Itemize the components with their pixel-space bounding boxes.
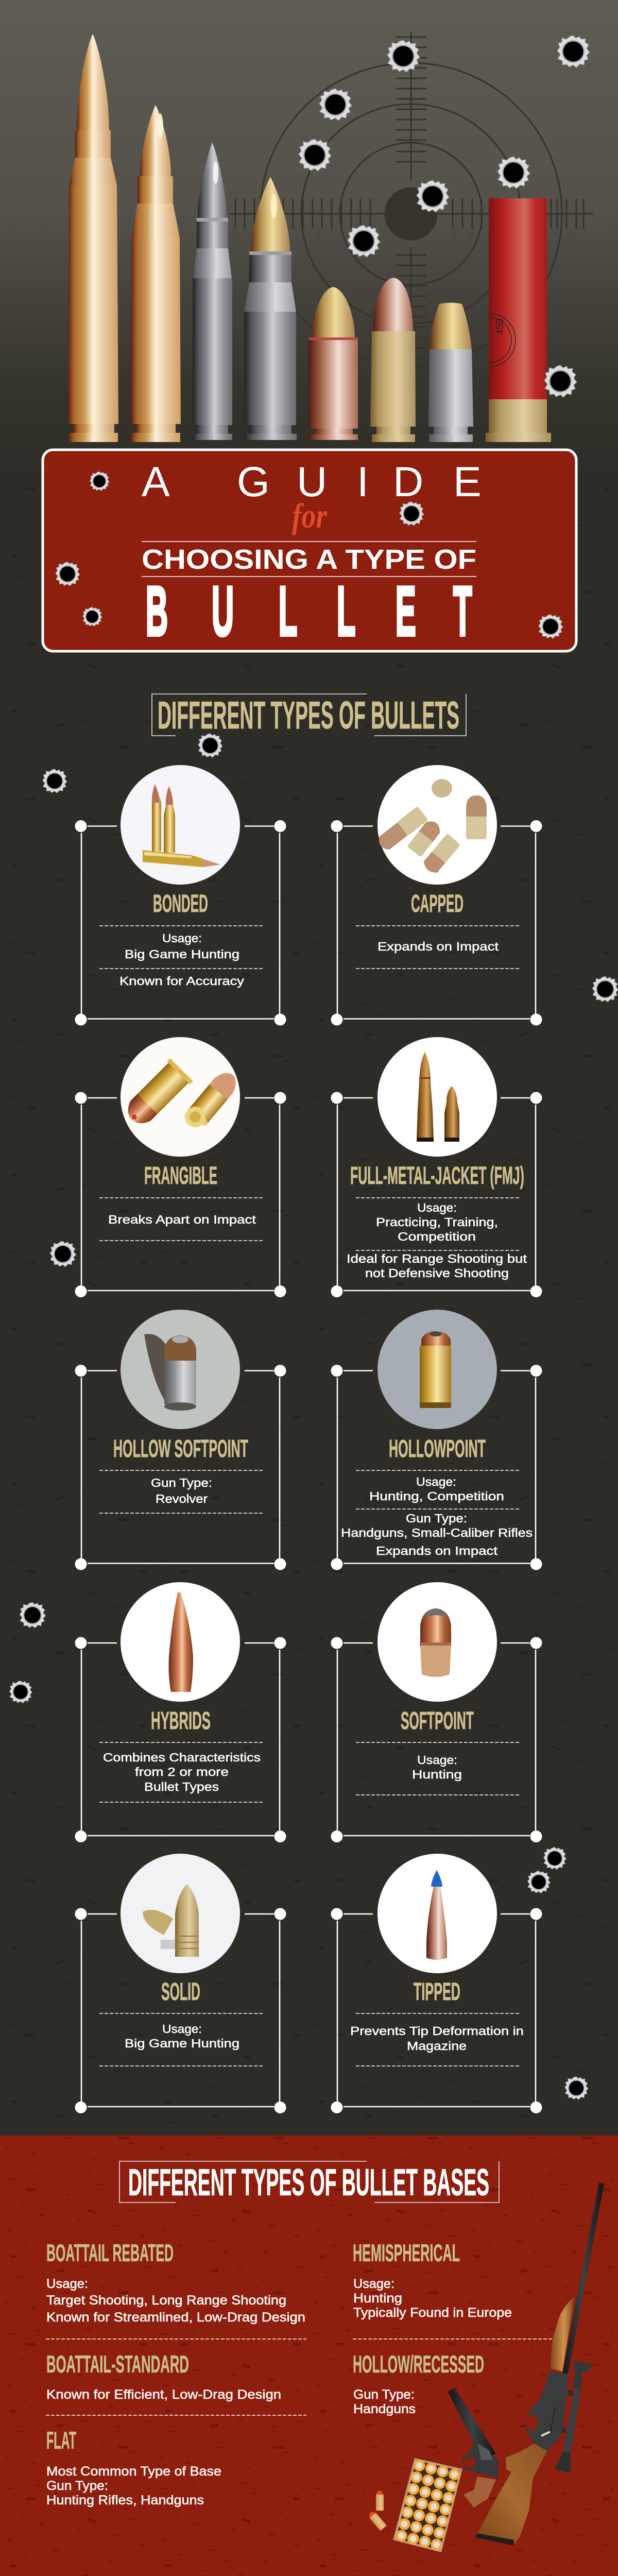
text: tipped details: Prevents Tip Deformation in [350, 2024, 524, 2038]
illustration: rifle [475, 2183, 604, 2546]
base: flat: FLAT [46, 2427, 76, 2454]
illustration: shooting target: 1 [232, 231, 235, 238]
bullet holes: upper grid [9, 734, 618, 2099]
card: tipped [331, 1854, 542, 2113]
text: solid details [99, 2013, 264, 2066]
photo: frangible bullets [120, 1037, 242, 1157]
bullet holes on plate [56, 471, 563, 638]
background: dark textured area [0, 479, 618, 2136]
text: tipped details [350, 2013, 524, 2066]
base: boattail rebated: BOATTAIL REBATED [46, 2239, 174, 2266]
title line: A Guide: A GUIDE [0, 459, 482, 505]
text: hybrids details: Combines Characteristics [103, 1751, 261, 1764]
text: hollow softpoint details: Revolver [156, 1492, 208, 1505]
text: hollowpoint details: Expands on Impact [376, 1544, 498, 1557]
photo: hollowpoint bullet [377, 1310, 497, 1429]
text: hybrids details: from 2 or more [135, 1765, 229, 1778]
photo: solid bullets [121, 1854, 240, 1973]
illustration: shooting target: 3 [555, 231, 558, 238]
base: flat: Gun Type: [46, 2479, 108, 2493]
text: solid details: Usage: [162, 2022, 202, 2036]
label: hollowpoint: HOLLOWPOINT [389, 1435, 486, 1463]
text: bonded details: Usage: [162, 931, 202, 945]
photo: softpoint bullet [377, 1582, 497, 1702]
text: bonded details [99, 926, 264, 988]
text: softpoint details: Usage: [417, 1753, 457, 1767]
illustration: cartridge box [393, 2458, 462, 2552]
text: FMJ details: not Defensive Shooting [365, 1266, 509, 1280]
title line: Choosing a type of: CHOOSING A TYPE OF [142, 544, 476, 575]
card: solid [75, 1854, 286, 2113]
illustration: shooting target: 2 [248, 231, 251, 238]
text: hybrids details [99, 1742, 264, 1802]
cartridge 4 [244, 177, 297, 440]
label: hybrids: HYBRIDS [151, 1707, 211, 1735]
cartridge 5 [308, 287, 358, 440]
text: softpoint details: Hunting [412, 1768, 462, 1781]
text: hollowpoint details: Hunting, Competition [369, 1489, 504, 1503]
photo: FMJ cartridges [377, 1037, 497, 1157]
illustration: shooting target: 8 [469, 231, 472, 238]
label: solid: SOLID [161, 1978, 200, 2006]
base: boattail standard: BOATTAIL-STANDARD [46, 2350, 189, 2378]
text: frangible details: Breaks Apart on Impact [108, 1213, 256, 1226]
text: hollow softpoint details: Gun Type: [151, 1476, 212, 1489]
photo: hybrid bullet [121, 1582, 240, 1702]
photo: bonded bullets [121, 765, 240, 885]
illustration: shooting target: 6 [317, 231, 320, 238]
shotgun shell: 450 [495, 318, 506, 335]
text: bonded details: Known for Accuracy [119, 974, 245, 988]
background: red section [0, 2136, 618, 2576]
illustration: shooting target: 9 [453, 231, 456, 238]
base: boattail rebated [46, 2239, 305, 2325]
text: frangible details [99, 1198, 264, 1241]
text: solid details: Big Game Hunting [125, 2037, 239, 2050]
background: top gradient [0, 0, 618, 479]
illustration: shooting target: 1 [589, 231, 592, 238]
base: hemispherical: Typically Found in Europe [353, 2306, 512, 2320]
card: bonded [75, 765, 286, 1025]
cartridge 1 [68, 34, 118, 442]
base: hollow recessed: Gun Type: [353, 2387, 415, 2402]
title plate [0, 450, 576, 651]
label: bonded: BONDED [153, 890, 208, 918]
base: hollow recessed [353, 2339, 555, 2416]
text: capped details [356, 926, 521, 969]
card: frangible [75, 1037, 286, 1297]
label: softpoint: SOFTPOINT [401, 1707, 474, 1735]
card: softpoint [331, 1582, 542, 1842]
label: frangible: FRANGIBLE [144, 1162, 217, 1190]
cartridge 2 [131, 105, 181, 442]
label: capped: CAPPED [411, 890, 464, 918]
base: boattail standard [46, 2339, 306, 2402]
illustration: shooting target: 7 [334, 231, 337, 238]
text: hollowpoint details: Gun Type: [406, 1512, 467, 1525]
text: capped details: Expands on Impact [377, 940, 499, 953]
text: hollowpoint details [341, 1470, 533, 1557]
heading: different types of bullets [152, 693, 466, 737]
card: hollowpoint [331, 1310, 542, 1570]
base: hemispherical: HEMISPHERICAL [353, 2239, 460, 2266]
cartridge 3 [193, 142, 232, 440]
base: hemispherical: Hunting [353, 2291, 402, 2306]
text: FMJ details: Practicing, Training, [376, 1215, 498, 1229]
base: hemispherical: Usage: [353, 2277, 394, 2291]
text: hollow softpoint details [99, 1470, 264, 1513]
text: FMJ details [347, 1198, 527, 1280]
label: hollow softpoint: HOLLOW SOFTPOINT [113, 1435, 248, 1463]
illustration: loose cartridges [367, 2490, 387, 2531]
base: boattail rebated: Known for Streamlined, Low-Drag Design [46, 2310, 305, 2325]
photo: tipped bullet [377, 1854, 497, 1973]
cartridge 6 [370, 278, 416, 442]
illustration: revolver [448, 2388, 498, 2507]
base: boattail rebated: Usage: [46, 2277, 88, 2291]
base: hemispherical [353, 2239, 512, 2320]
cartridge 7 [428, 303, 473, 442]
illustration: shooting target: 2 [572, 231, 575, 238]
title word: Bullet: BULLET [146, 572, 472, 651]
card: hollow softpoint [75, 1310, 286, 1570]
text: hollowpoint details: Handguns, Small-Caliber Rifles [341, 1526, 533, 1539]
title word: for: for [292, 496, 327, 535]
base: boattail standard: Known for Efficient, Low-Drag Design [46, 2387, 281, 2402]
photo: capped bullets [375, 765, 497, 885]
base: hollow recessed: HOLLOW/RECESSED [353, 2350, 484, 2378]
illustration: row of cartridges [68, 34, 551, 442]
photo: hollow softpoint bullet [121, 1310, 240, 1429]
base: boattail rebated: Target Shooting, Long Range Shooting [46, 2293, 286, 2308]
bullet holes around target [299, 36, 590, 397]
base: flat: Hunting Rifles, Handguns [46, 2493, 204, 2507]
card: full metal jacket [331, 1037, 542, 1297]
text: bonded details: Big Game Hunting [125, 947, 239, 961]
text: FMJ details: Usage: [417, 1201, 457, 1214]
illustration: shooting target [230, 32, 593, 391]
shotgun shell [486, 198, 551, 442]
text: softpoint details [356, 1742, 521, 1795]
text: tipped details: Magazine [407, 2039, 467, 2053]
card: capped [331, 765, 542, 1025]
text: hybrids details: Bullet Types [144, 1780, 219, 1793]
base: flat: Most Common Type of Base [46, 2464, 221, 2479]
label: tipped: TIPPED [414, 1978, 460, 2006]
base: flat [46, 2415, 306, 2507]
base: hollow recessed: Handguns [353, 2402, 416, 2416]
text: FMJ details: Ideal for Range Shooting but [347, 1252, 527, 1265]
text: hollowpoint details: Usage: [416, 1475, 456, 1488]
card: hybrids [75, 1582, 286, 1842]
text: FMJ details: Competition [398, 1230, 476, 1243]
